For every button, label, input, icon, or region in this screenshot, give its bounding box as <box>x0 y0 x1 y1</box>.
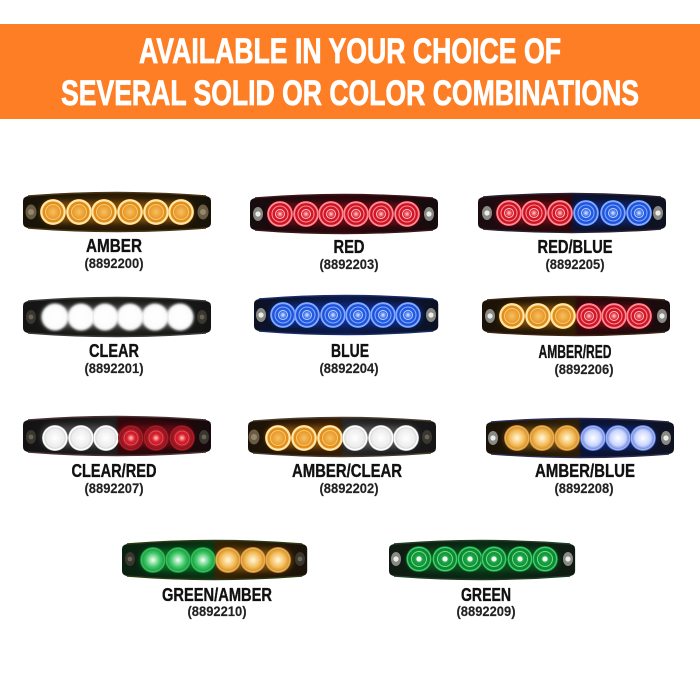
light: red <box>250 194 438 234</box>
part number: red/blue: (8892205) <box>546 256 604 272</box>
title line 1: AVAILABLE IN YOUR CHOICE OF <box>139 32 561 71</box>
label: amber/clear: AMBER/CLEAR <box>292 461 402 481</box>
part number: amber/red: (8892206) <box>554 361 614 377</box>
product: amber/red <box>482 296 670 377</box>
part number: green/amber: (8892210) <box>188 603 246 619</box>
product: green/amber <box>122 540 307 619</box>
light: red/blue <box>478 194 666 232</box>
label: green: GREEN <box>461 585 511 605</box>
product: clear/red <box>23 416 211 496</box>
product: green <box>389 540 575 619</box>
light: amber <box>23 192 211 232</box>
product: red <box>250 194 438 272</box>
light: green <box>389 540 575 580</box>
banner background <box>0 24 700 119</box>
part number: red: (8892203) <box>320 256 378 272</box>
light: blue <box>254 296 438 334</box>
light: green/amber <box>122 540 307 580</box>
part number: green: (8892209) <box>456 603 516 619</box>
part number: clear: (8892201) <box>84 360 144 376</box>
label: amber/blue: AMBER/BLUE <box>535 461 635 481</box>
product: amber <box>23 192 211 271</box>
label: red/blue: RED/BLUE <box>538 237 612 257</box>
part number: amber: (8892200) <box>84 255 144 271</box>
title banner <box>0 24 700 119</box>
product: clear <box>23 298 211 376</box>
part number: amber/clear: (8892202) <box>320 480 378 496</box>
product: blue <box>254 296 438 376</box>
product: red/blue <box>478 194 666 272</box>
label: amber: AMBER <box>86 236 142 256</box>
label: clear/red: CLEAR/RED <box>72 461 156 481</box>
label: red: RED <box>334 237 364 257</box>
part number: blue: (8892204) <box>320 360 378 376</box>
light: amber/clear <box>248 418 436 456</box>
product: amber/blue <box>486 418 674 496</box>
part number: clear/red: (8892207) <box>84 480 144 496</box>
label: green/amber: GREEN/AMBER <box>162 585 272 605</box>
label: clear: CLEAR <box>89 341 139 361</box>
label: blue: BLUE <box>331 341 369 361</box>
product: amber/clear <box>248 418 436 496</box>
label: amber/red: AMBER/RED <box>538 342 612 362</box>
light: amber/blue <box>486 418 674 458</box>
light: clear <box>23 298 211 336</box>
light: amber/red <box>482 296 670 336</box>
part number: amber/blue: (8892208) <box>554 480 614 496</box>
light: clear/red <box>23 416 211 456</box>
